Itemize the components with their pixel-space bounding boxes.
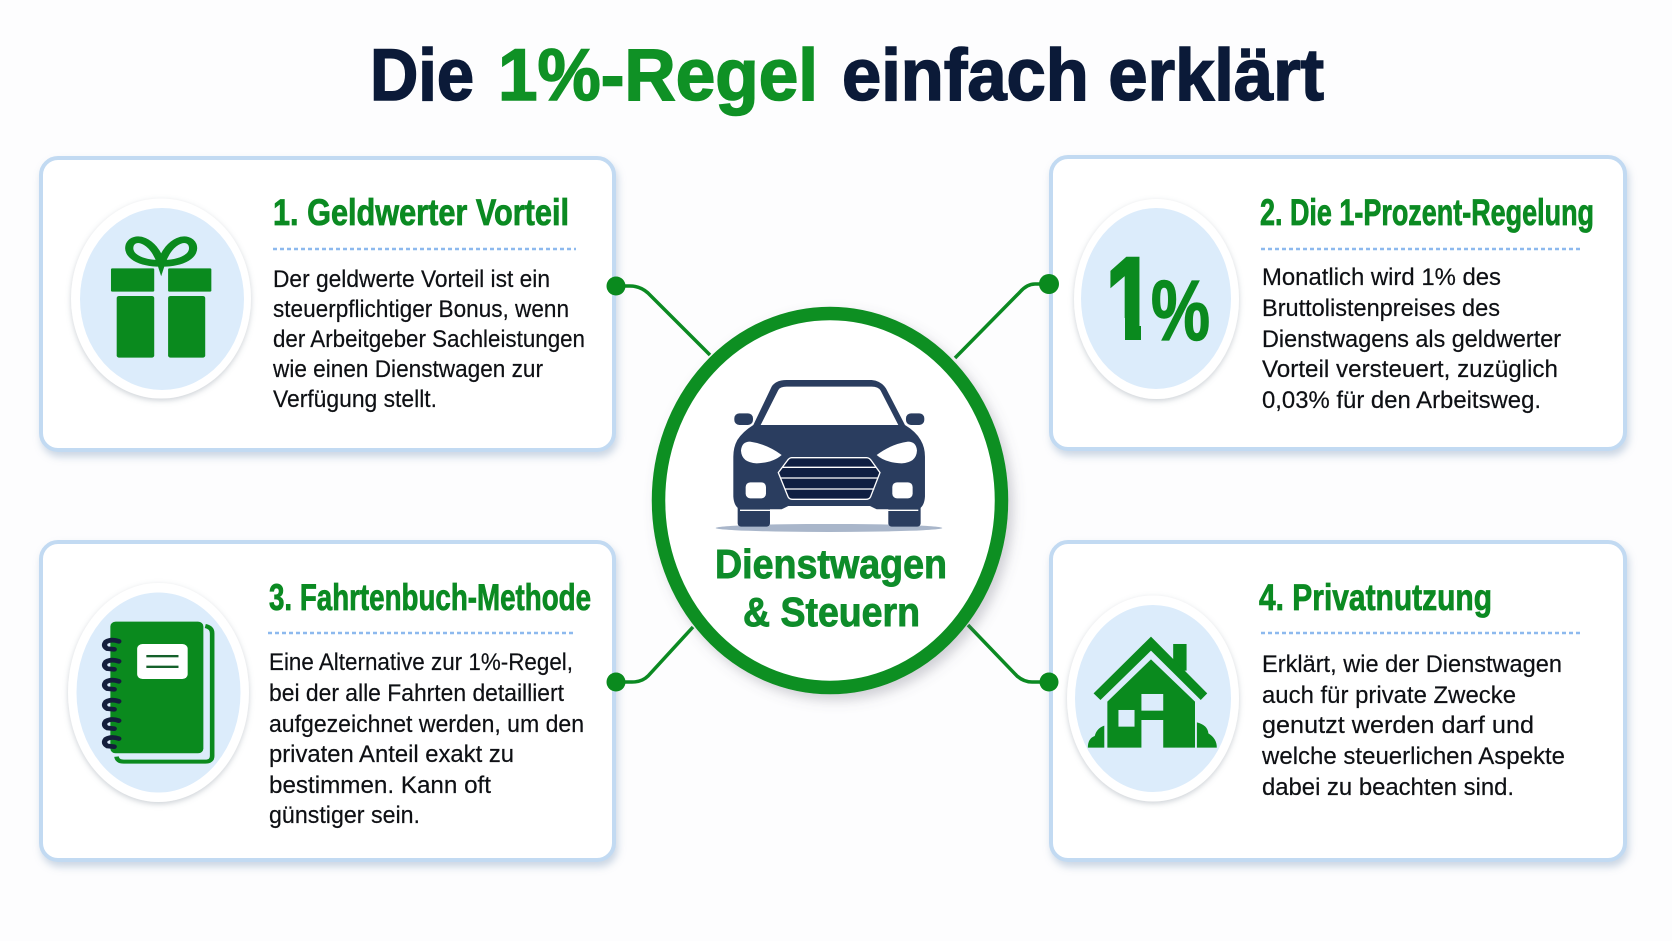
heading: 1. Geldwerter Vorteil (273, 192, 569, 233)
central label: Dienstwagen (715, 541, 947, 587)
icon: one percent: % (1151, 264, 1210, 359)
icon: gift (71, 198, 251, 398)
central label: & Steuern (743, 589, 920, 635)
text block: Monatlich wird 1% des (1262, 264, 1501, 291)
connector: bottom left (616, 627, 693, 682)
text block: bei der alle Fahrten detailliert (269, 680, 564, 707)
icon: house (1067, 596, 1239, 802)
connector: bottom right (968, 625, 1049, 682)
title: Die (370, 35, 474, 116)
icon: one percent: 1 (1106, 234, 1154, 366)
icon: notebook (68, 583, 249, 802)
heading: 3. Fahrtenbuch-Methode (269, 577, 591, 618)
icon: one percent (1074, 199, 1239, 399)
connector: top right (955, 284, 1049, 358)
panel: card 3 Fahrtenbuch-Methode (41, 542, 614, 860)
connector dots (606, 274, 1059, 692)
text block: Dienstwagens als geldwerter (1262, 326, 1561, 353)
text block: aufgezeichnet werden, um den (269, 711, 584, 738)
title: einfach erklärt (842, 35, 1324, 116)
text block (1261, 651, 1565, 801)
icon: car (716, 380, 942, 532)
text block (269, 649, 584, 829)
text block: günstiger sein. (269, 802, 420, 829)
text block: wie einen Dienstwagen zur (272, 356, 543, 383)
text block: genutzt werden darf und (1262, 712, 1534, 739)
text block: Verfügung stellt. (273, 386, 437, 413)
text block (1262, 264, 1561, 414)
text block: der Arbeitgeber Sachleistungen (273, 326, 585, 353)
text block: 0,03% für den Arbeitsweg. (1262, 387, 1541, 414)
text block: auch für private Zwecke (1262, 682, 1516, 709)
heading: 4. Privatnutzung (1259, 577, 1492, 618)
text block: Vorteil versteuert, zuzüglich (1262, 356, 1558, 383)
text block: privaten Anteil exakt zu (269, 741, 514, 768)
text block: Der geldwerte Vorteil ist ein (273, 266, 550, 293)
text block: bestimmen. Kann oft (269, 772, 491, 799)
title (370, 35, 1324, 116)
text block: welche steuerlichen Aspekte (1261, 743, 1565, 770)
central circle (658, 314, 1002, 688)
text block (272, 266, 585, 413)
text block: Eine Alternative zur 1%-Regel, (269, 649, 573, 676)
panel: card 2 Die 1-Prozent-Regelung (1051, 157, 1625, 449)
text block: steuerpflichtiger Bonus, wenn (273, 296, 569, 323)
text block: dabei zu beachten sind. (1262, 774, 1514, 801)
panel: card 1 Geldwerter Vorteil (41, 158, 614, 450)
panel: card 4 Privatnutzung (1051, 542, 1625, 860)
text block: Bruttolistenpreises des (1262, 295, 1500, 322)
central label (715, 541, 947, 635)
text block: Erklärt, wie der Dienstwagen (1262, 651, 1562, 678)
connector: top left (616, 286, 710, 355)
title: 1%-Regel (498, 35, 818, 116)
